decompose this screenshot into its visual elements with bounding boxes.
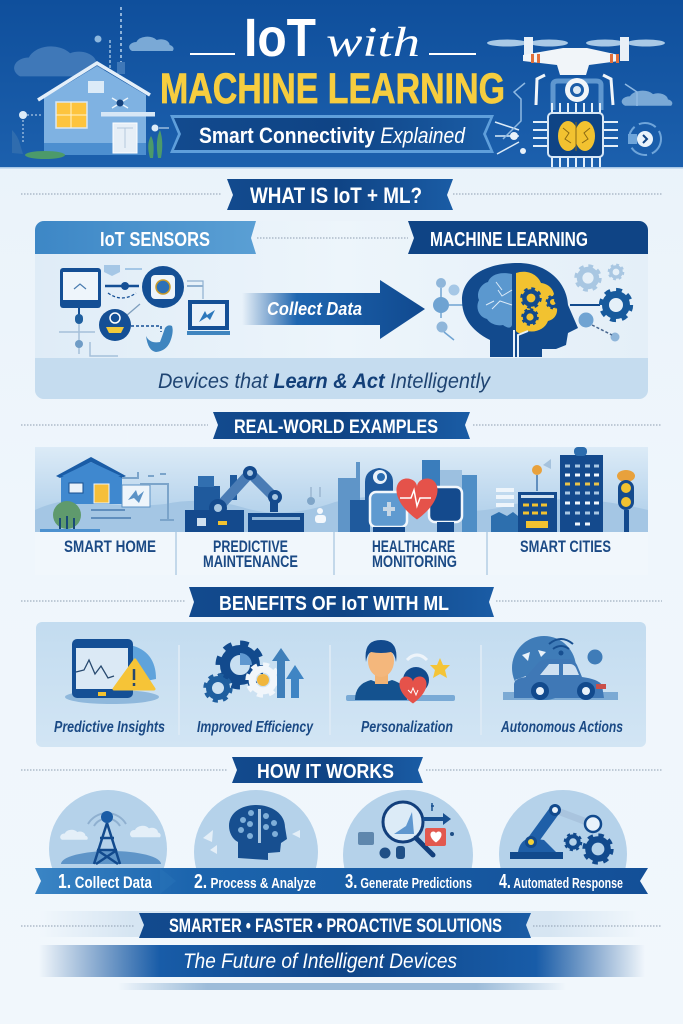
- tagline banner: SMARTER • FASTER • PROACTIVE SOLUTIONS: [169, 916, 502, 937]
- section heading: how it works: HOW IT WORKS: [257, 761, 394, 783]
- strip: tagline: [35, 358, 648, 399]
- tab: IoT sensors: [35, 221, 256, 254]
- dividers and labels: MAINTENANCE: [203, 552, 298, 571]
- section heading: what is IoT + ML: [21, 179, 662, 210]
- tab: machine learning: MACHINE LEARNING: [430, 229, 588, 251]
- title: IoT with: with: [326, 20, 420, 66]
- dividers and labels: PREDICTIVE: [213, 537, 288, 556]
- step ribbon: 1. Collect Data: [58, 871, 152, 893]
- step ribbon: 4. Automated Response: [499, 871, 623, 893]
- example: predictive maintenance: [185, 466, 326, 532]
- title: IoT with: IoT: [244, 8, 316, 68]
- benefit: predictive insights: [54, 639, 165, 736]
- example: healthcare monitoring: [338, 460, 477, 532]
- panel: real-world examples: [35, 447, 648, 575]
- section heading: what is IoT + ML: WHAT IS IoT + ML?: [250, 183, 422, 208]
- tagline banner: [21, 911, 662, 938]
- section heading: benefits: BENEFITS OF IoT WITH ML: [219, 593, 449, 615]
- icon: AI head with brain and gears: [433, 263, 630, 357]
- benefit: predictive insights: Predictive Insights: [54, 719, 165, 736]
- section heading: how it works: [21, 757, 662, 783]
- icon: AI chip with brain: [495, 83, 672, 167]
- benefit: personalization: Personalization: [361, 719, 453, 736]
- section heading: real-world examples: [21, 412, 662, 439]
- step ribbon: 3. Generate Predictions: [345, 871, 472, 893]
- process steps: [35, 790, 648, 894]
- arrow: collect data: Collect Data: [267, 299, 362, 319]
- dividers and labels: [64, 532, 611, 575]
- dividers and labels: SMART CITIES: [520, 537, 611, 556]
- benefit: improved efficiency: [197, 645, 314, 736]
- step ribbon: 2. Process & Analyze: [194, 871, 316, 893]
- dividers and labels: HEALTHCARE: [372, 537, 455, 556]
- title: machine learning: MACHINE LEARNING: [160, 65, 505, 113]
- example: smart home: [40, 457, 174, 532]
- dividers and labels: SMART HOME: [64, 537, 156, 556]
- panel: what is IoT + ML: [35, 221, 648, 399]
- icon: drone: [487, 37, 665, 110]
- closing band: [39, 945, 645, 977]
- step 4 illustration: automated response: [499, 790, 627, 868]
- subtitle ribbon: Smart Connectivity Explained: [199, 123, 466, 148]
- title: IoT with: [190, 8, 476, 68]
- strip: tagline: Devices that Learn & Act Intelligently: [158, 370, 491, 393]
- tab: IoT sensors: IoT SENSORS: [100, 229, 210, 251]
- step ribbon: [35, 868, 648, 894]
- step 3 illustration: generate predictions: [343, 790, 473, 868]
- benefit: autonomous actions: Autonomous Actions: [500, 719, 623, 736]
- tab: machine learning: [408, 221, 648, 254]
- panel: benefits: [36, 622, 646, 747]
- benefit: improved efficiency: Improved Efficiency: [197, 719, 314, 736]
- section heading: real-world examples: REAL-WORLD EXAMPLES: [234, 417, 438, 438]
- icon group: IoT sensor devices: [59, 265, 230, 356]
- step 1 illustration: collect data tower: [49, 790, 167, 868]
- icon: smart house: [12, 7, 174, 159]
- benefit: personalization: [346, 640, 455, 736]
- benefit: autonomous actions: [500, 636, 623, 736]
- subtitle ribbon: [170, 115, 494, 153]
- example: smart cities: [491, 447, 635, 532]
- step 2 illustration: process brain: [194, 790, 318, 868]
- arrow: collect data: [242, 280, 425, 339]
- section heading: benefits: [21, 587, 662, 617]
- band shadow: [118, 983, 566, 990]
- closing band: The Future of Intelligent Devices: [183, 950, 457, 973]
- header banner: [0, 0, 683, 168]
- dividers and labels: MONITORING: [372, 552, 457, 571]
